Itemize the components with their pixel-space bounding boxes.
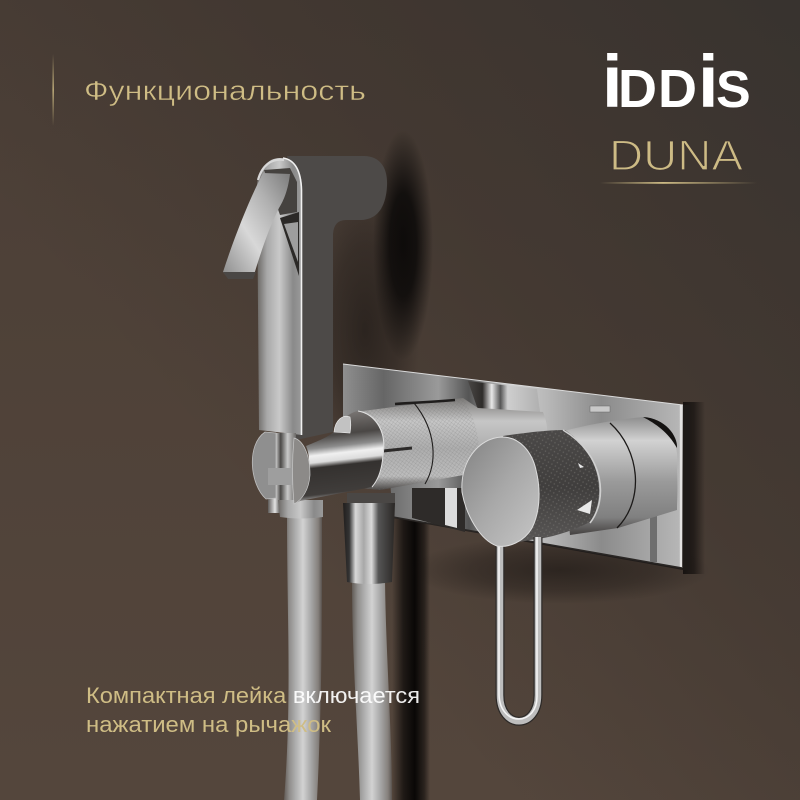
plate upper reflection [468,381,540,412]
brand logo: iDDiS: D [658,59,697,119]
brand logo: iDDiS: i [602,40,623,123]
hose connector [343,493,395,800]
knob cap [462,437,539,546]
hand shower [223,156,387,440]
caption line 1: Компактная лейка включается [86,683,420,708]
heading rule [52,54,54,126]
knurled barrel [355,398,547,490]
holder clip [334,416,351,433]
lower plate bracket [412,488,465,532]
shower chrome face [257,158,302,435]
shower lever [223,173,290,278]
caption line 2: нажатием на рычажок [86,712,331,737]
mixer body [355,398,677,721]
heading text: Функциональность [84,75,366,106]
shower holder [252,411,384,518]
plate vertical reflection [650,510,657,562]
shower recess under lever [264,168,297,215]
holder collar [278,500,323,518]
holder neck [268,433,296,513]
knurled grip [503,430,599,545]
wall plate [343,364,690,570]
product shadows on wall [310,130,710,800]
loop lever [499,535,538,721]
DUNA rule [600,182,757,184]
holder arm [294,411,383,504]
caption [86,683,420,737]
holder left cap [252,432,276,499]
hose: main [284,515,322,800]
plate logo mark [590,406,610,412]
brand logo: iDDiS: S [716,61,751,119]
shower grip [287,156,387,440]
brand logo: iDDiS: D [618,59,657,119]
right chrome rings [560,417,677,535]
brand logo: iDDiS: i [698,40,719,123]
holder right lens [292,438,310,504]
DUNA text: DUNA [609,132,743,180]
